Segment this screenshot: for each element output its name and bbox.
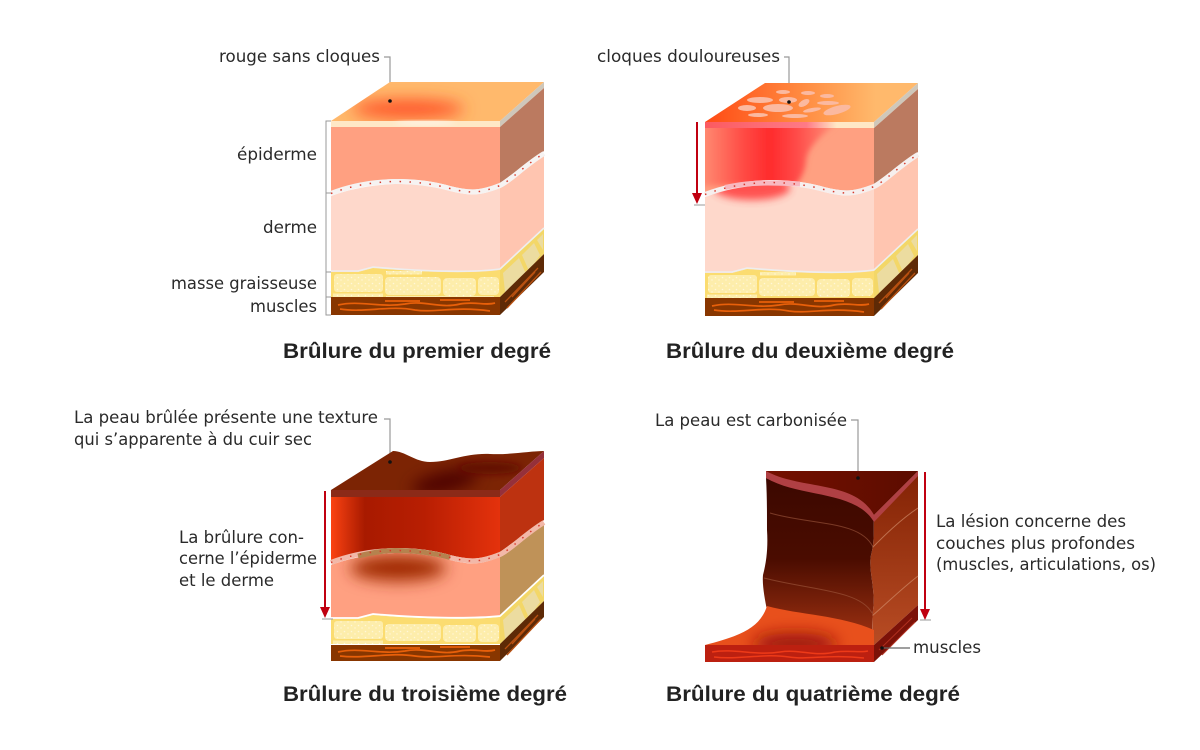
epidermis bbox=[331, 88, 544, 191]
label: carbonisée bbox=[655, 411, 858, 478]
label: cloques douloureuses: cloques douloureuses bbox=[597, 47, 780, 67]
membrane bbox=[331, 522, 544, 562]
skin block: first degree bbox=[331, 82, 544, 315]
charred skin block bbox=[705, 471, 918, 662]
muscle layer bbox=[331, 601, 544, 661]
label: épiderme: épiderme bbox=[237, 145, 317, 165]
epidermis bbox=[331, 458, 544, 560]
fat layer bbox=[331, 228, 544, 297]
charred top surface bbox=[331, 451, 544, 500]
cavity wall bbox=[763, 478, 874, 640]
label: texture de cuir sec: qui s’apparente à du cuir sec bbox=[74, 430, 312, 450]
skin block: third degree bbox=[331, 451, 544, 661]
membrane bbox=[705, 154, 918, 194]
panel: third degree burn bbox=[74, 408, 567, 706]
dermis bbox=[705, 157, 918, 274]
burned surface band bbox=[705, 122, 874, 128]
label: texture de cuir sec bbox=[74, 408, 390, 462]
fat layer bbox=[705, 229, 918, 298]
label: couches profondes: (muscles, articulations, os) bbox=[936, 555, 1156, 575]
heading: first degree: Brûlure du premier degré bbox=[283, 340, 551, 363]
panel: fourth degree burn bbox=[655, 411, 1156, 706]
muscle layer bbox=[705, 255, 918, 316]
dermis bbox=[331, 156, 544, 273]
label: couches profondes: La lésion concerne des bbox=[936, 512, 1126, 532]
fat layer bbox=[331, 575, 544, 644]
label: texture de cuir sec: La peau brûlée présente une texture bbox=[74, 408, 378, 428]
label: muscles bbox=[880, 638, 981, 658]
right side face bbox=[870, 471, 918, 645]
label: derme: derme bbox=[263, 218, 317, 238]
charred top bbox=[766, 471, 918, 522]
label: épiderme et derme: et le derme bbox=[179, 571, 274, 591]
label: carbonisée: La peau est carbonisée bbox=[655, 411, 847, 431]
label: couches profondes: couches plus profondes bbox=[936, 534, 1135, 554]
heading: second degree: Brûlure du deuxième degré bbox=[666, 340, 954, 363]
heading: fourth degree: Brûlure du quatrième degré bbox=[666, 683, 960, 706]
muscle layer bbox=[705, 605, 918, 662]
label: muscles: muscles bbox=[913, 638, 981, 658]
label: rouge sans cloques: rouge sans cloques bbox=[219, 47, 380, 67]
top surface with blisters bbox=[705, 83, 918, 128]
label: épiderme et derme: La brûlure con- bbox=[179, 528, 304, 548]
label: masse graisseuse: masse graisseuse bbox=[171, 274, 317, 294]
label: épiderme et derme bbox=[179, 528, 317, 591]
dermis bbox=[331, 525, 544, 619]
heading: third degree: Brûlure du troisième degré bbox=[283, 683, 567, 706]
cavity floor bbox=[705, 606, 874, 645]
label: épiderme et derme: cerne l’épiderme bbox=[179, 549, 317, 569]
right side bbox=[874, 89, 918, 184]
muscle layer bbox=[331, 254, 544, 315]
label: couches profondes bbox=[936, 512, 1156, 575]
label: cloques douloureuses bbox=[597, 47, 789, 102]
layer brackets bbox=[326, 121, 331, 315]
membrane bbox=[331, 154, 544, 194]
arrow: lesion depth bbox=[920, 472, 931, 620]
skin block: second degree bbox=[700, 83, 918, 316]
label: muscles: muscles bbox=[250, 297, 317, 317]
panel: second degree burn bbox=[597, 47, 954, 363]
epidermis with red burn bbox=[705, 128, 874, 192]
arrow: burn depth bbox=[692, 122, 705, 205]
label: rouge sans cloques bbox=[219, 47, 390, 101]
arrow: burn depth bbox=[320, 491, 333, 619]
top surface with redness bbox=[331, 82, 544, 127]
panel: first degree burn bbox=[171, 47, 551, 363]
